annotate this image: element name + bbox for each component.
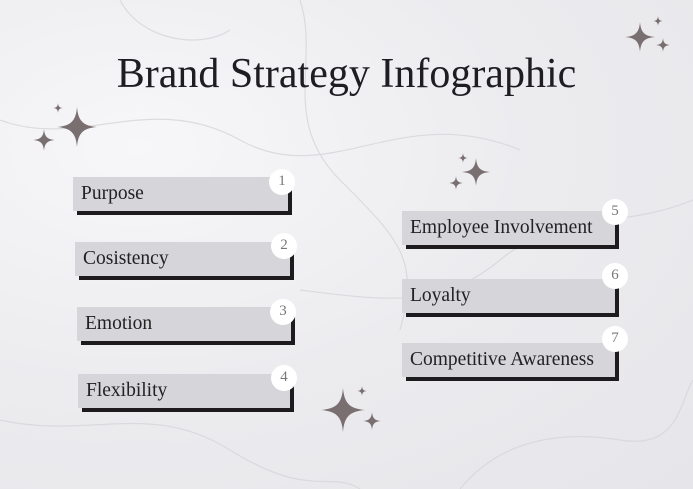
item 1: Purpose: Purpose	[81, 183, 144, 204]
item 5: Employee Involvement	[402, 199, 628, 249]
item 2: Cosistency: 2	[280, 237, 288, 253]
item 7: Competitive Awareness: 7	[611, 330, 619, 346]
item 1: Purpose	[73, 169, 295, 215]
item 3: Emotion	[77, 299, 296, 345]
item 2: Cosistency	[75, 233, 297, 280]
item 1: Purpose: 1	[278, 173, 286, 189]
item 7: Competitive Awareness: Competitive Awareness	[410, 349, 594, 370]
title: Brand Strategy Infographic	[117, 51, 576, 97]
item 3: Emotion: 3	[279, 303, 287, 319]
item 6: Loyalty	[402, 263, 628, 317]
item 5: Employee Involvement: Employee Involvement	[410, 217, 592, 238]
item 4: Flexibility	[78, 365, 297, 412]
stars: top left	[34, 103, 96, 151]
item 7: Competitive Awareness	[402, 326, 628, 381]
item 4: Flexibility: Flexibility	[86, 380, 167, 401]
item 6: Loyalty: Loyalty	[410, 285, 471, 306]
item 3: Emotion: Emotion	[85, 313, 152, 334]
item 6: Loyalty: 6	[611, 267, 619, 283]
item 5: Employee Involvement: 5	[611, 203, 619, 219]
stars: middle	[449, 153, 490, 190]
item 4: Flexibility: 4	[280, 369, 288, 385]
item 2: Cosistency: Cosistency	[83, 248, 169, 269]
stars: top right	[626, 16, 670, 52]
stars: bottom middle	[322, 386, 380, 432]
